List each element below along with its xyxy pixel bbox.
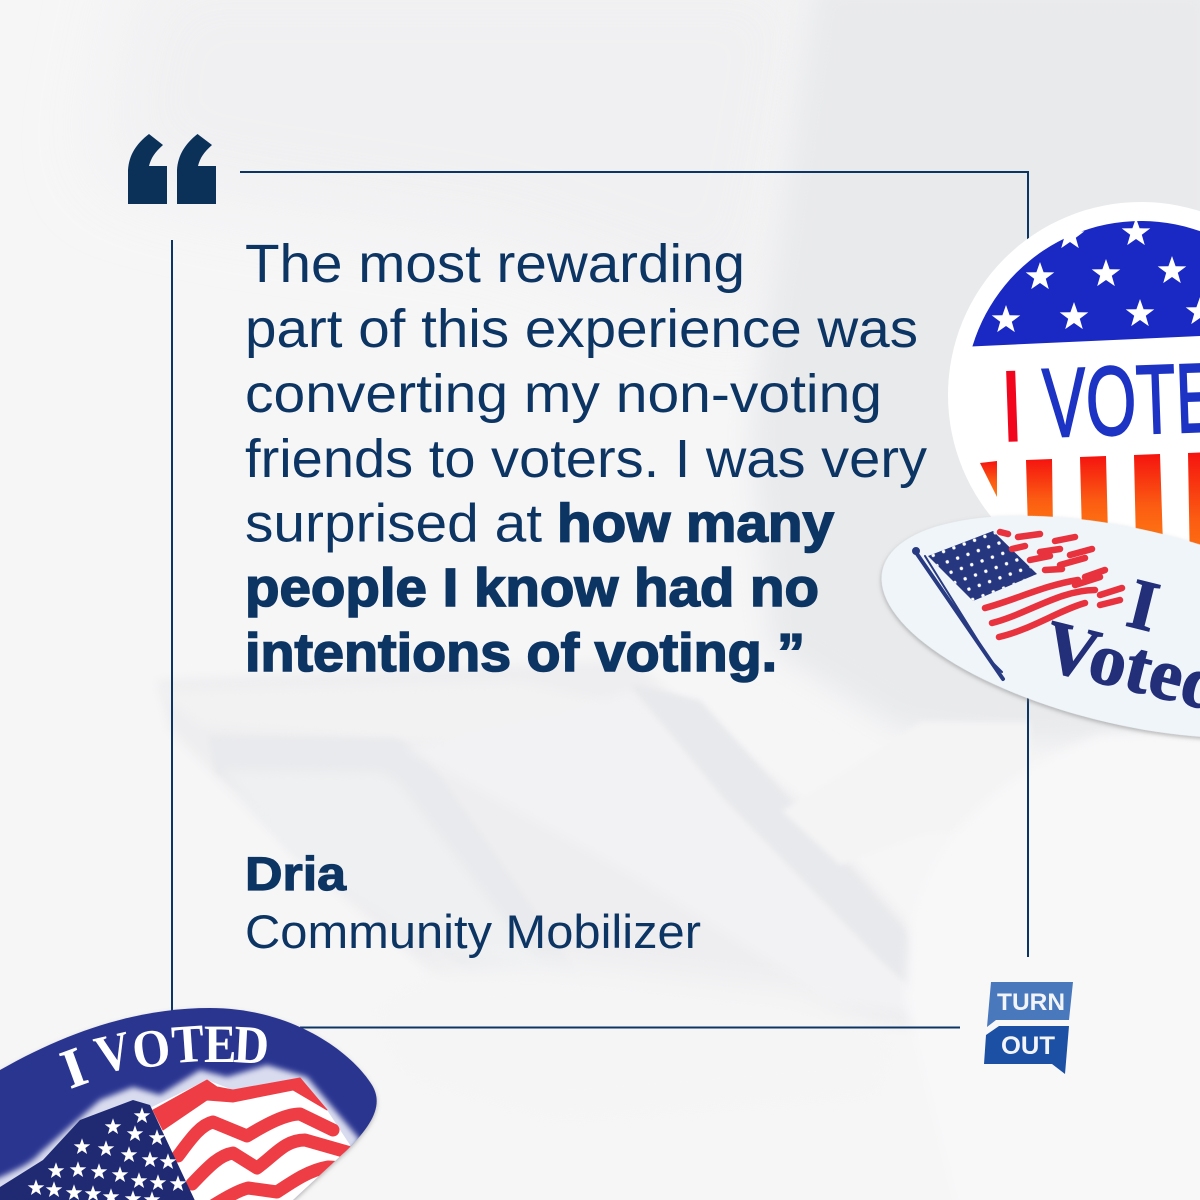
quote text: people I know had no (245, 558, 819, 618)
sticker I VOTED lettering: D (232, 1015, 271, 1076)
logo: Turn Out: TURN (997, 989, 1065, 1016)
sticker red stripes (980, 452, 1200, 570)
sticker I Voted lettering: I (1120, 563, 1167, 647)
quote text: intentions of voting.” (245, 623, 805, 683)
sticker: oval I Voted with flag (879, 515, 1200, 741)
sticker I VOTED lettering (53, 1014, 271, 1101)
logo top speech bubble (987, 982, 1073, 1027)
sticker blue star field (972, 221, 1200, 346)
attribution: role: Community Mobilizer (245, 905, 701, 958)
flag pole (914, 548, 1003, 679)
quote text: surprised at (245, 494, 542, 554)
flag stripes (985, 532, 1122, 637)
sticker flag canton (0, 1100, 197, 1200)
sticker I VOTED lettering: E (204, 1015, 236, 1075)
quote text: part of this experience was (245, 299, 918, 359)
icon: opening quotation marks (128, 134, 216, 204)
quote text: converting my non-voting (245, 364, 882, 424)
sticker I VOTED lettering: V (89, 1020, 137, 1086)
quote text: how many (557, 494, 834, 554)
sticker I VOTED lettering: I (53, 1036, 95, 1101)
sticker flag stars (28, 1107, 186, 1200)
sticker I VOTED lettering: I (999, 351, 1025, 463)
sticker flag halo (0, 1065, 360, 1200)
flag canton (928, 531, 1037, 601)
quote frame lines (172, 172, 1028, 1028)
quote text: The most rewarding (245, 234, 745, 294)
sticker: bottom-left oval I VOTED (0, 1008, 377, 1200)
logo: Turn Out: OUT (1001, 1032, 1055, 1060)
logo: Turn Out (984, 982, 1073, 1074)
sticker: round I VOTED (948, 202, 1200, 545)
sticker I VOTED lettering: O (128, 1017, 174, 1081)
sticker I VOTED lettering: T (170, 1014, 206, 1076)
sticker flag red stripes (153, 1078, 347, 1200)
logo bottom speech bubble (984, 1026, 1069, 1074)
quote text: friends to voters. I was very (245, 429, 927, 489)
attribution: name: Dria (245, 847, 347, 900)
sticker flag white field (150, 1078, 350, 1200)
quote text (245, 234, 927, 683)
